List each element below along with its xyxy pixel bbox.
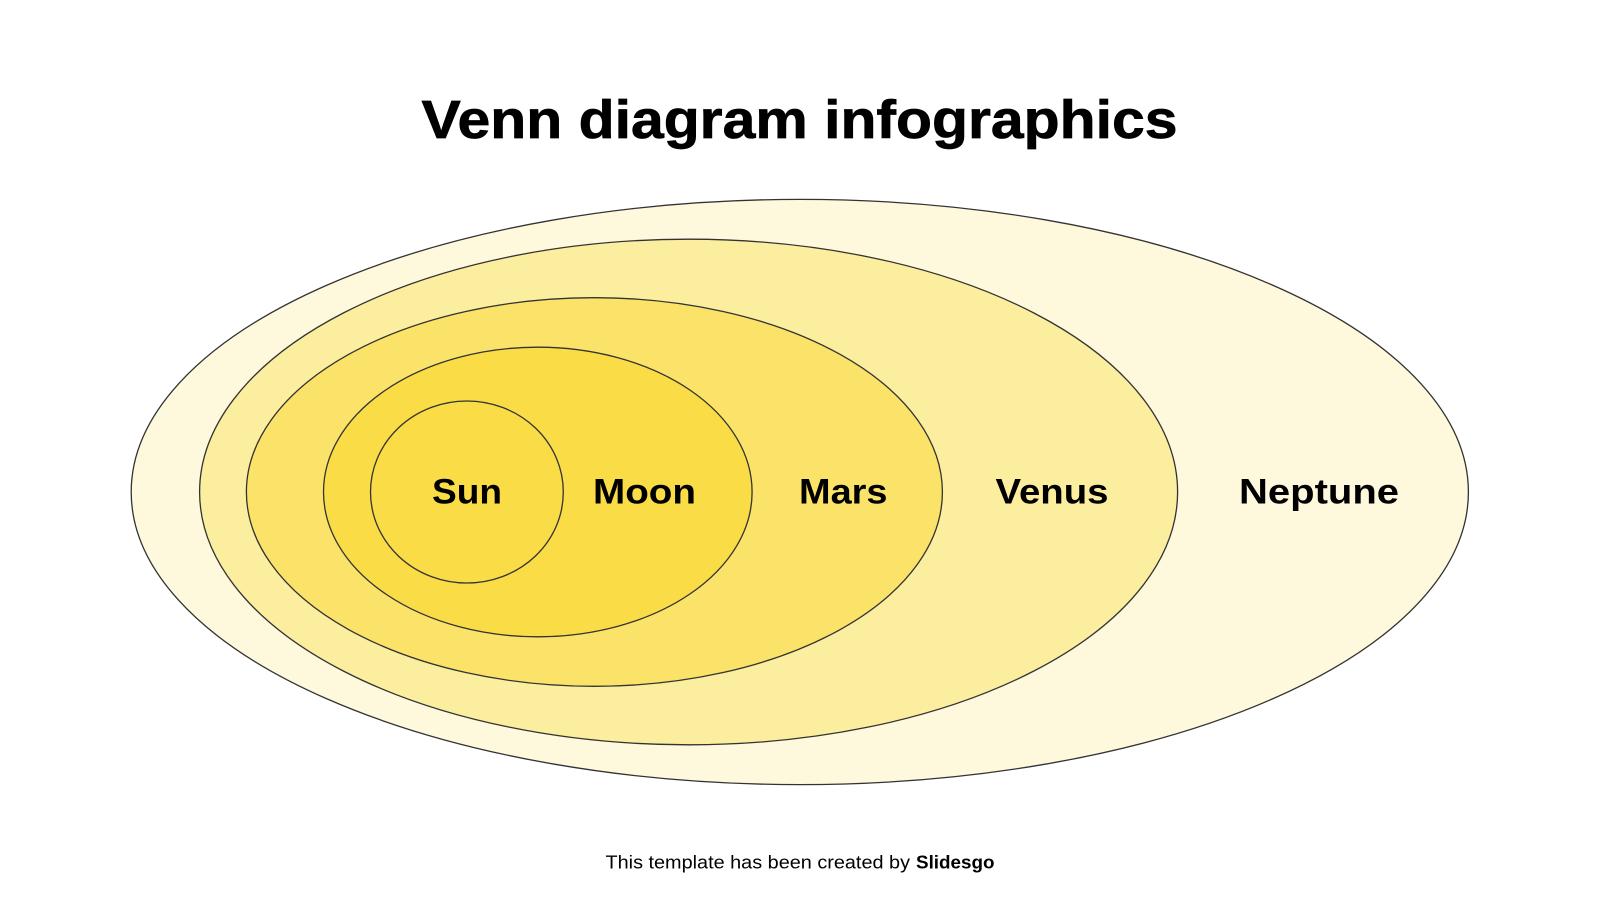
credit brand: Slidesgo [916, 852, 995, 872]
label: Mars: Mars [799, 472, 888, 511]
credit text: This template has been created by [606, 852, 910, 872]
title: Venn diagram infographics [422, 90, 1178, 150]
ellipse: Moon [324, 347, 752, 637]
footer credit [606, 852, 995, 872]
label: Sun: Sun [432, 472, 502, 511]
label: Neptune: Neptune [1239, 472, 1399, 511]
ellipse: Venus [200, 239, 1178, 745]
ellipse: Neptune [131, 199, 1468, 785]
label: Moon: Moon [593, 472, 696, 511]
venn diagram [131, 199, 1468, 785]
ellipse: Mars [246, 298, 942, 686]
ellipse: Sun [370, 401, 563, 583]
label: Venus: Venus [996, 472, 1108, 511]
